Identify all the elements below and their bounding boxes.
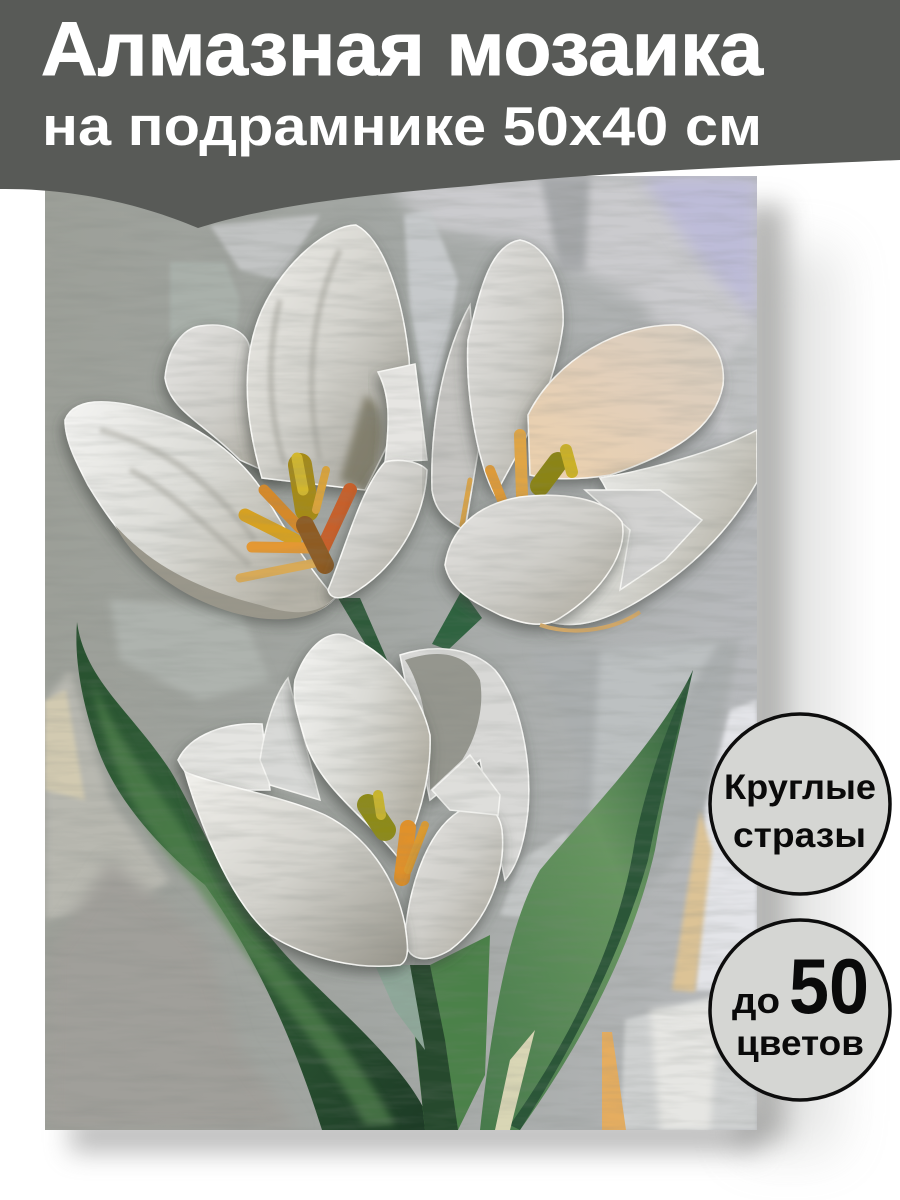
peach back petal [528,325,723,479]
large centre petal [294,634,430,860]
left side petal [432,305,480,530]
centre dark stem [408,965,458,1130]
front petal orange rim [540,612,640,631]
tall back petal [468,240,563,495]
badge: up to 50 colours [710,920,890,1100]
front left petal [185,772,407,966]
left petal lower shade [115,525,335,619]
inner shadow of petal [340,395,382,490]
right leaf pale base [495,1030,535,1130]
badge: up to 50 colours: 50 [789,942,869,1030]
badge: round rhinestones: стразы [733,816,866,855]
canvas drop shadow [70,205,837,1152]
header banner [0,0,900,228]
front right petal [405,805,503,959]
left petal brush streaks [100,250,340,565]
stamens [462,435,572,525]
badge: up to 50 colours: цветов [736,1024,864,1063]
left green leaf [76,622,432,1130]
right back petal [400,649,529,880]
stamens [240,458,350,578]
small back petal [165,325,285,480]
small right folded petal [585,490,702,590]
right green leaf [480,670,693,1130]
centre green leaves [412,935,490,1130]
lower right petal [550,430,757,625]
right leaf dark edge [510,670,693,1130]
tulip: bottom [178,634,529,966]
stem right [432,590,482,650]
thin petal [260,678,320,800]
right back inner dark [405,654,481,790]
badge: round rhinestones: Круглые [724,768,876,807]
front petal [445,495,623,624]
stamens [368,795,425,878]
left small petal [178,724,270,790]
stem left [338,598,388,662]
big left petal [65,402,335,617]
large back petal [247,225,409,490]
badge: up to 50 colours: до [732,980,780,1021]
right front petal [328,460,427,598]
right sliver petal [432,755,500,815]
tulip: top left [65,225,427,619]
pale leaf [375,965,425,1050]
title: Алмазная мозаика [41,7,764,92]
subtitle: на подрамнике 50х40 см [42,95,762,157]
left leaf highlight [92,680,395,1125]
paint texture overlay [45,176,757,1130]
badge: round rhinestones [710,714,890,894]
right upper petal [378,364,427,462]
painted background [45,176,757,1130]
tulip: top right [432,240,757,631]
painting: white tulips [45,176,757,1130]
